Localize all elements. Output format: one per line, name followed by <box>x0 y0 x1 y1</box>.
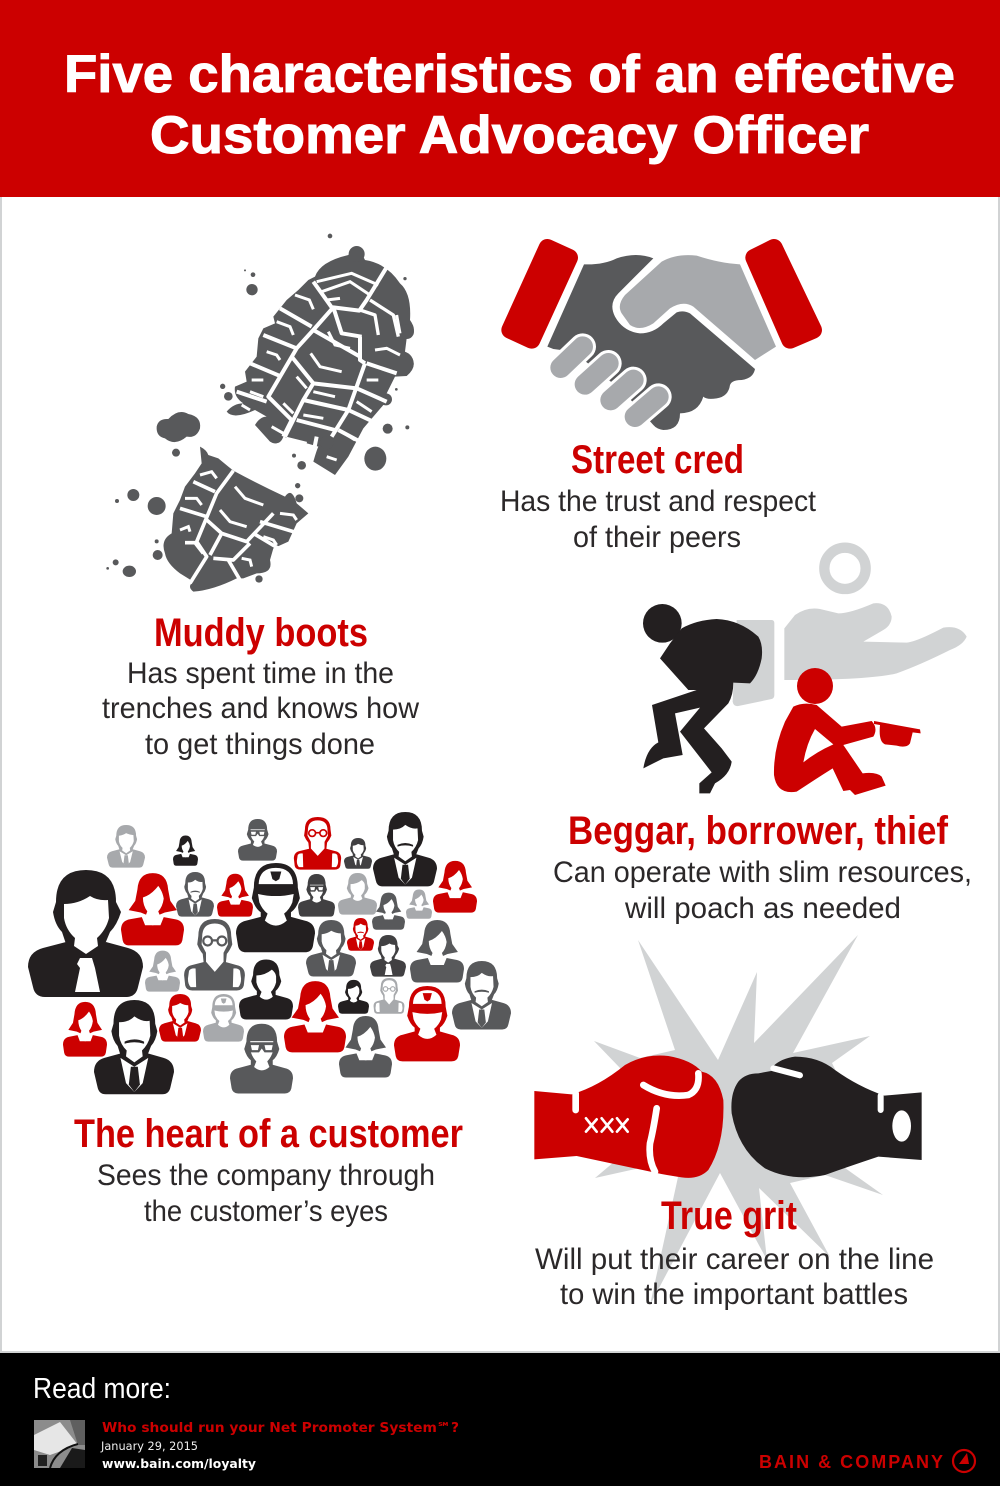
icon: boxing gloves <box>534 1056 922 1178</box>
person <box>452 961 511 1029</box>
person <box>121 873 184 945</box>
dark hand <box>547 255 755 430</box>
person <box>298 874 335 917</box>
person <box>230 1024 293 1093</box>
text: Street cred description <box>500 485 816 554</box>
open hand <box>784 603 967 680</box>
left cuff <box>510 248 569 340</box>
body frame <box>1 197 999 1352</box>
person <box>238 819 277 861</box>
light hand <box>620 255 776 360</box>
text: Muddy boots description: to get things done <box>145 728 375 761</box>
person <box>344 838 372 869</box>
text: heart description: Sees the company through <box>97 1159 435 1192</box>
text: Muddy boots description <box>102 657 420 761</box>
text: Beggar description: will poach as needed <box>624 892 901 925</box>
icon: starburst <box>594 935 883 1305</box>
thief figure <box>643 604 762 793</box>
heading: Street cred: Street cred <box>571 438 744 482</box>
person <box>28 870 143 997</box>
person <box>410 920 464 982</box>
article thumbnail <box>34 1420 85 1468</box>
black glove <box>731 1057 922 1177</box>
heading: Beggar, borrower, thief: Beggar, borrower, thief <box>568 809 949 853</box>
title: Five characteristics of an effective <box>64 45 955 104</box>
header banner <box>0 0 1000 197</box>
person <box>306 920 356 977</box>
person <box>372 893 405 930</box>
text: heart description: the customer’s eyes <box>144 1195 388 1228</box>
person <box>159 994 201 1042</box>
article url: www.bain.com/loyalty <box>102 1456 256 1471</box>
mud splatter <box>106 234 409 583</box>
top boot print <box>227 246 414 475</box>
text: heart description <box>97 1159 435 1228</box>
person <box>338 980 369 1014</box>
text: True grit description: to win the important battles <box>560 1278 908 1311</box>
person <box>284 981 346 1052</box>
person <box>433 861 477 913</box>
article title: Who should run your Net Promoter System℠? <box>102 1420 459 1436</box>
icon: handshake <box>510 248 813 430</box>
person <box>173 835 198 866</box>
person <box>294 817 341 870</box>
person <box>145 951 180 992</box>
Bain logo mark <box>953 1450 975 1472</box>
person <box>63 1002 107 1057</box>
text: Muddy boots description: Has spent time in the <box>127 657 394 690</box>
person <box>406 889 432 919</box>
text: Street cred description: of their peers <box>573 521 741 554</box>
icon: crowd of people <box>28 812 511 1094</box>
fingers <box>561 347 658 417</box>
person <box>374 978 404 1014</box>
title: Customer Advocacy Officer <box>150 106 869 165</box>
footer <box>0 1353 1000 1486</box>
person <box>94 1000 174 1094</box>
stolen hand palm <box>733 620 774 706</box>
person <box>347 918 374 951</box>
coin ring <box>824 548 866 589</box>
person <box>373 812 437 886</box>
person <box>107 825 145 868</box>
person <box>370 935 406 977</box>
beggar figure <box>774 668 921 795</box>
person <box>217 874 253 917</box>
person <box>338 873 377 915</box>
red glove <box>534 1056 723 1178</box>
text: Beggar description <box>553 856 972 925</box>
text: Muddy boots description: trenches and knows how <box>102 692 420 725</box>
title <box>64 45 955 165</box>
icon: beggar and thief <box>643 548 967 795</box>
person <box>394 986 460 1061</box>
text: True grit description: Will put their career on the line <box>535 1243 934 1276</box>
person <box>339 1016 392 1078</box>
person <box>236 863 315 952</box>
text: Beggar description: Can operate with slim resources, <box>553 856 972 889</box>
person <box>176 872 214 917</box>
person <box>203 994 244 1042</box>
read more label: Read more: <box>33 1373 171 1405</box>
person <box>184 919 245 990</box>
text: True grit description <box>535 1243 934 1311</box>
article date: January 29, 2015 <box>100 1439 198 1453</box>
icon: muddy boot prints <box>106 234 414 592</box>
heading: Muddy boots: Muddy boots <box>154 611 368 655</box>
bottom boot print <box>163 447 308 592</box>
Bain & Company wordmark: BAIN & COMPANY <box>759 1452 943 1472</box>
heading: The heart of a customer: The heart of a customer <box>74 1112 463 1156</box>
person <box>239 959 293 1020</box>
heading: True grit: True grit <box>661 1194 797 1238</box>
text: Street cred description: Has the trust and respect <box>500 485 816 518</box>
right cuff <box>754 248 813 340</box>
